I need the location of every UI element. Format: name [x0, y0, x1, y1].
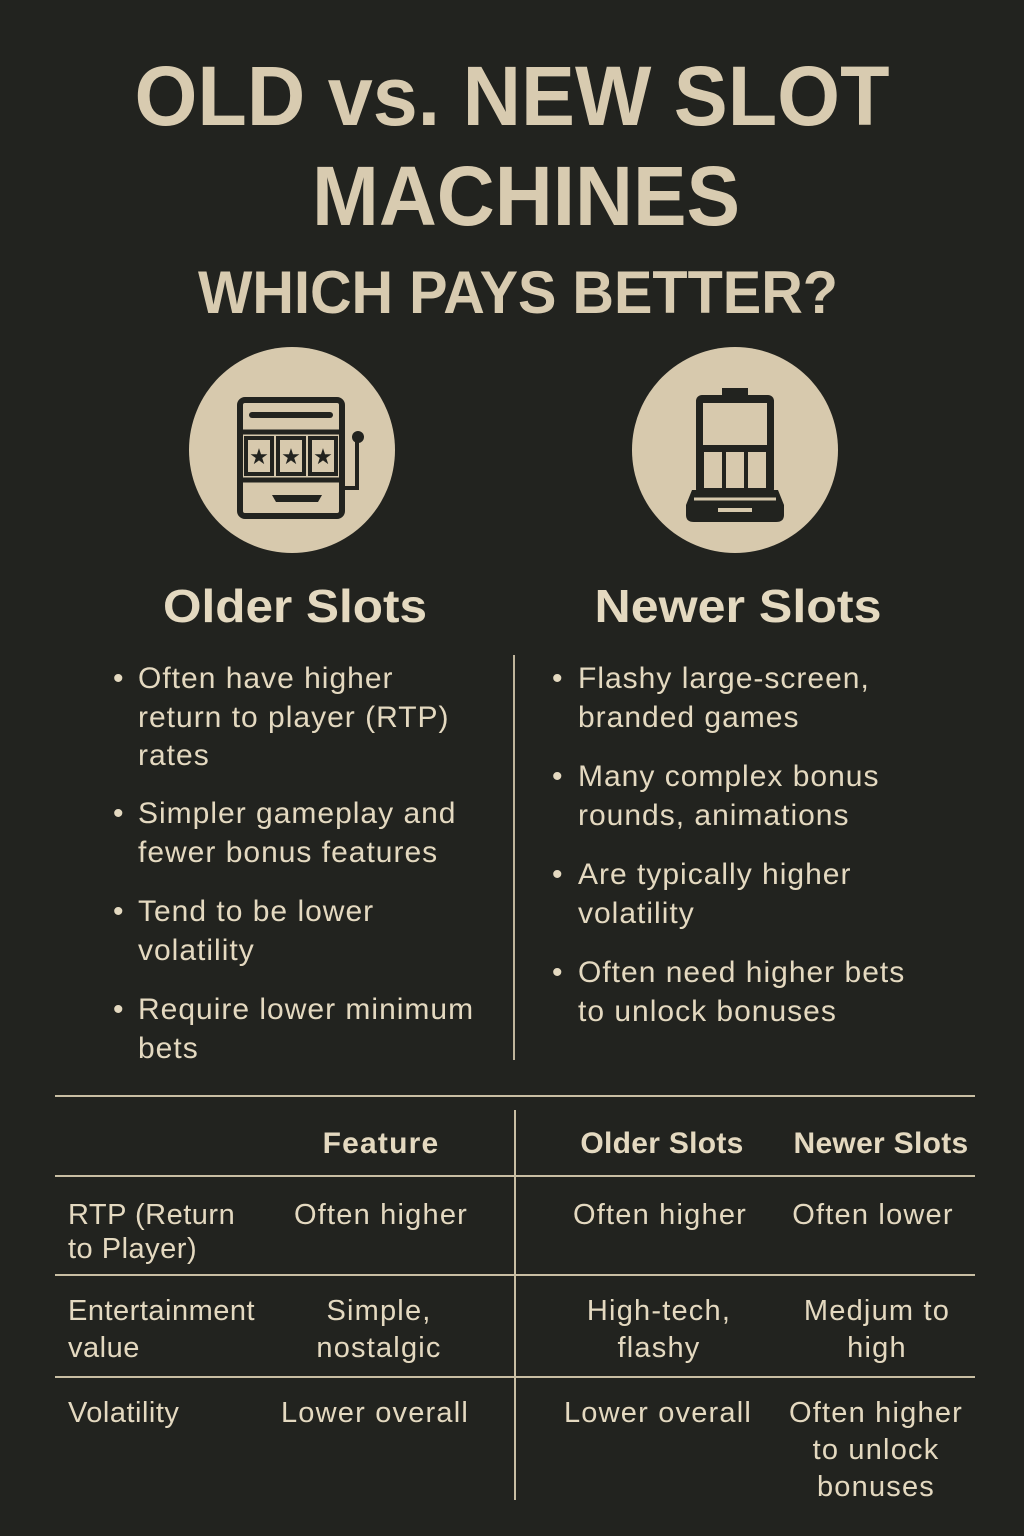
comparison table: Feature: [323, 1127, 439, 1160]
comparison table: Often higher: [294, 1199, 468, 1231]
list: newer slots bullets: •: [552, 956, 564, 989]
title: OLD vs. NEW SLOT: [134, 49, 890, 143]
list: older slots bullets: volatility: [138, 934, 255, 967]
title: WHICH PAYS BETTER?: [198, 259, 838, 326]
list: older slots bullets: •: [113, 662, 125, 695]
comparison table: Often higher: [573, 1199, 747, 1231]
comparison table: Medjum to: [804, 1295, 950, 1327]
comparison table: bonuses: [817, 1471, 935, 1503]
list: newer slots bullets: •: [552, 760, 564, 793]
comparison table: to unlock: [813, 1434, 939, 1466]
comparison table: [55, 1096, 975, 1503]
comparison table: High-tech,: [587, 1295, 731, 1327]
title: MACHINES: [312, 149, 740, 243]
list: older slots bullets: [113, 662, 474, 1065]
comparison table: RTP (Return: [68, 1199, 235, 1231]
icon: old slot machine: [189, 347, 395, 553]
list: newer slots bullets: volatility: [578, 897, 695, 930]
list: newer slots bullets: branded games: [578, 701, 799, 734]
list: newer slots bullets: •: [552, 858, 564, 891]
list: newer slots bullets: Are typically higher: [578, 858, 851, 891]
comparison table: Older Slots: [580, 1127, 744, 1160]
list: older slots bullets: •: [113, 993, 125, 1026]
list: older slots bullets: fewer bonus features: [138, 836, 438, 869]
list: older slots bullets: •: [113, 797, 125, 830]
list: newer slots bullets: to unlock bonuses: [578, 995, 837, 1028]
heading: Older Slots: Older Slots: [163, 580, 427, 632]
list: newer slots bullets: Flashy large-screen,: [578, 662, 870, 695]
list: newer slots bullets: Many complex bonus: [578, 760, 879, 793]
list: older slots bullets: bets: [138, 1032, 199, 1065]
comparison table: Volatility: [68, 1397, 179, 1429]
list: older slots bullets: •: [113, 895, 125, 928]
list: older slots bullets: Simpler gameplay and: [138, 797, 456, 830]
comparison table: Often lower: [792, 1199, 954, 1231]
list: older slots bullets: Often have higher: [138, 662, 394, 695]
comparison table: high: [847, 1332, 907, 1364]
icon: new slot machine: [632, 347, 838, 553]
comparison table: Often higher: [789, 1397, 963, 1429]
heading: Newer Slots: Newer Slots: [594, 580, 882, 632]
comparison table: Lower overall: [281, 1397, 469, 1429]
comparison table: to Player): [68, 1233, 197, 1265]
comparison table: nostalgic: [316, 1332, 442, 1364]
comparison table: Lower overall: [564, 1397, 752, 1429]
icon: old slot machine: ★: [281, 444, 301, 469]
list: newer slots bullets: [552, 662, 905, 1028]
comparison table: Newer Slots: [793, 1127, 969, 1160]
list: newer slots bullets: rounds, animations: [578, 799, 849, 832]
comparison table: value: [68, 1332, 140, 1364]
icon: old slot machine: ★: [249, 444, 269, 469]
list: older slots bullets: Require lower minimum: [138, 993, 474, 1026]
list: older slots bullets: return to player (RTP): [138, 701, 450, 734]
title: [134, 49, 890, 326]
list: newer slots bullets: Often need higher bets: [578, 956, 905, 989]
list: older slots bullets: rates: [138, 739, 210, 772]
comparison table: flashy: [618, 1332, 700, 1364]
comparison table: Simple,: [326, 1295, 432, 1327]
comparison table: Entertainment: [68, 1295, 255, 1327]
icon: old slot machine: ★: [313, 444, 333, 469]
list: newer slots bullets: •: [552, 662, 564, 695]
list: older slots bullets: Tend to be lower: [138, 895, 374, 928]
